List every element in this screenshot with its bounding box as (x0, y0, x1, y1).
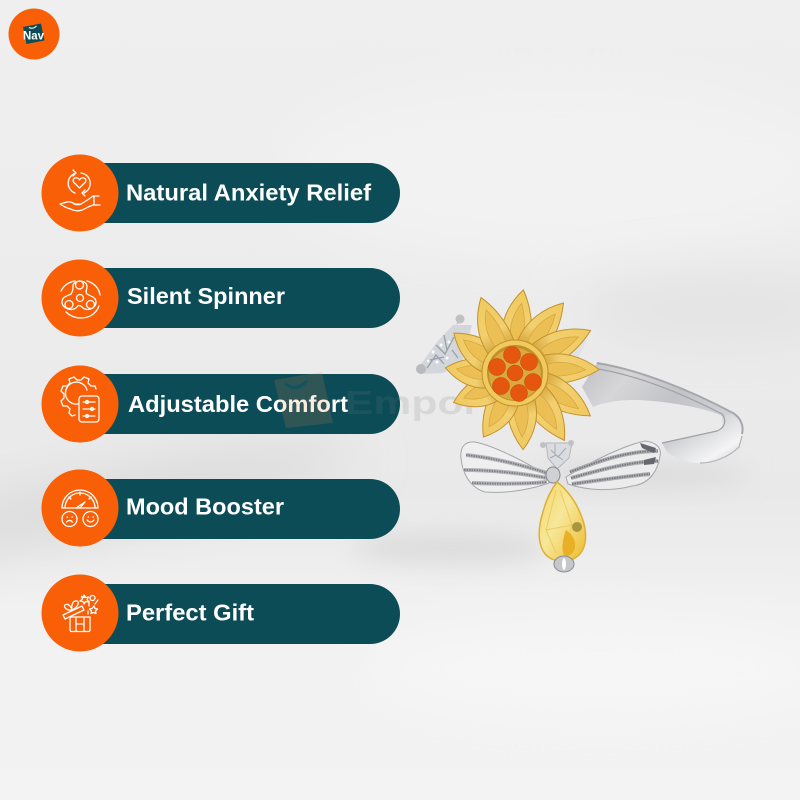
petals (444, 289, 600, 451)
left wing (461, 442, 549, 492)
feature: Silent Spinner (42, 260, 400, 336)
icon: gear with sliders (61, 377, 99, 422)
icon: heart in hand (60, 170, 100, 211)
logo badge (8, 8, 60, 60)
ring band (582, 363, 743, 463)
bee (461, 440, 660, 572)
watermark: Empor (345, 384, 480, 421)
feature: Natural Anxiety Relief (42, 154, 400, 232)
label: Perfect Gift (126, 600, 254, 626)
label: Silent Spinner (127, 283, 285, 309)
flower centre (482, 340, 548, 406)
side diamond (416, 314, 587, 374)
crown gem (540, 440, 574, 469)
head (546, 467, 560, 483)
teardrop body (539, 482, 586, 561)
sunflower (444, 289, 600, 451)
logo badge: Nav (23, 30, 45, 42)
feature: Adjustable Comfort (42, 366, 400, 442)
icon: open gift box (63, 595, 98, 632)
feature: Mood Booster (42, 470, 400, 546)
label: Mood Booster (126, 494, 284, 520)
feature: Perfect Gift (42, 574, 400, 652)
label: Adjustable Comfort (128, 391, 348, 417)
right wing (566, 441, 660, 490)
label: Natural Anxiety Relief (126, 180, 371, 206)
tail ball (554, 556, 574, 572)
icon: gauge with faces (62, 490, 98, 526)
icon: fidget spinner (61, 281, 100, 318)
watermark (274, 372, 480, 428)
